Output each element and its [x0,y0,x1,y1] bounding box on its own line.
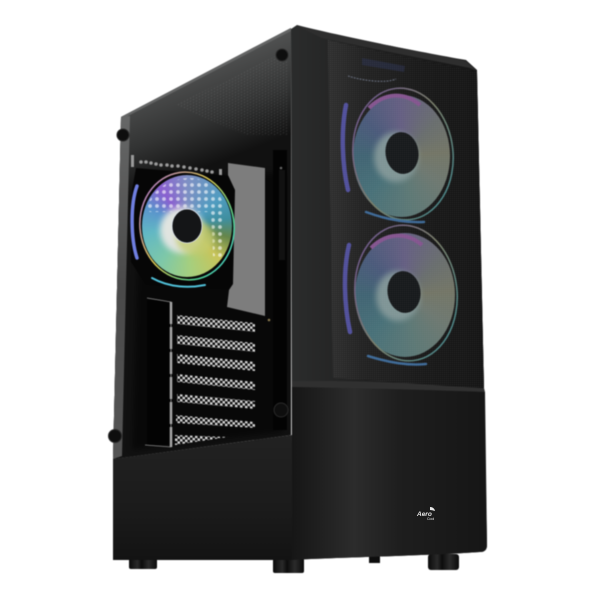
expansion slot vents [175,315,255,445]
perforation dots [146,178,224,258]
disc [355,233,455,357]
glass left edge [113,116,130,459]
gray SSD plate [227,163,265,316]
rear fan bracket [132,168,223,267]
fan disc [142,175,232,277]
screws [108,49,288,442]
case body [108,25,490,573]
rear side strips [132,186,137,258]
front fan two [345,220,464,366]
front mesh panel [328,40,484,386]
hub glow [160,207,204,253]
top mesh logo [348,58,405,81]
top tray holes [131,155,222,178]
brand logo: Cool [427,517,434,521]
hub yellow glow [176,221,214,255]
vertical chassis strip [273,150,287,430]
rear fan ring [133,166,241,286]
base divider band [292,381,485,392]
mesh overlay [328,40,480,382]
disc [353,95,450,217]
front fan one [343,83,460,225]
pc case product image [107,24,488,574]
rings [354,224,459,362]
rings [352,86,455,221]
hub [386,270,422,314]
feet [129,554,459,573]
side base [113,435,292,560]
front column [291,25,487,560]
PSU shroud outline [145,298,171,447]
front base [292,387,487,560]
brand logo: Aero [416,511,432,518]
hub glow [374,132,418,182]
fan hub [172,209,202,243]
hub glow [376,271,420,321]
glass side panel [113,28,291,459]
rear fan [132,166,241,287]
hub [384,132,420,174]
top edge highlight [297,26,477,71]
interior details [131,150,287,430]
brand logo [416,507,435,521]
